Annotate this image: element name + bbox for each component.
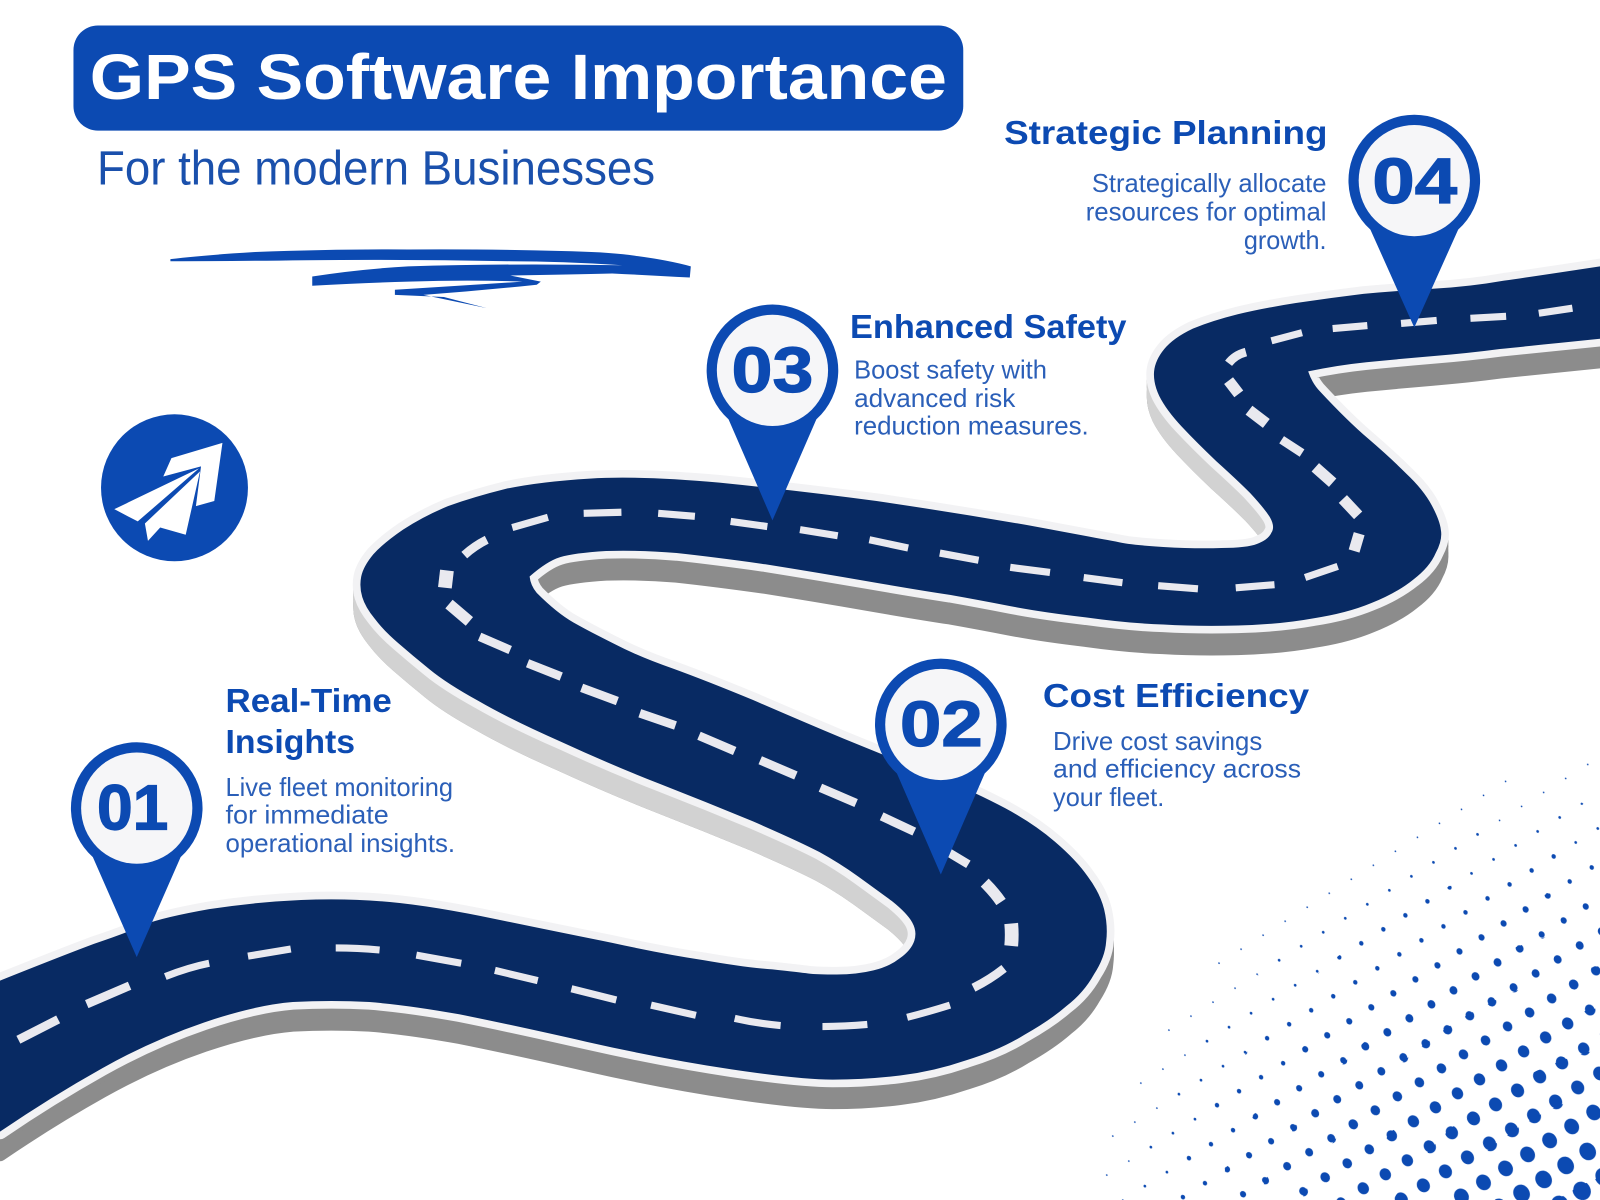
number 04: 04 bbox=[1372, 145, 1457, 217]
road: light side walls bbox=[0, 272, 1600, 1154]
step 01: text block bbox=[226, 683, 455, 858]
icon: paper plane bbox=[114, 468, 200, 541]
number 02: 02 bbox=[900, 688, 983, 760]
description: Strategically allocate bbox=[1092, 170, 1327, 198]
description: your fleet. bbox=[1053, 784, 1164, 812]
halftone dot pattern bbox=[1084, 759, 1600, 1200]
step 04: text block bbox=[1004, 115, 1328, 255]
heading: Real-Time Insights: Insights bbox=[226, 724, 355, 761]
road: dark side wall bbox=[0, 272, 1600, 1154]
title banner bbox=[73, 26, 963, 131]
logo: circle with paper plane arrow bbox=[101, 414, 248, 561]
description: growth. bbox=[1244, 227, 1327, 255]
description: Boost safety with bbox=[854, 357, 1047, 385]
description: and efficiency across bbox=[1053, 756, 1301, 784]
description: Drive cost savings bbox=[1053, 728, 1262, 756]
description bbox=[226, 774, 455, 858]
brush stroke decoration bbox=[170, 249, 691, 308]
description: reduction measures. bbox=[854, 413, 1089, 441]
road: asphalt surface bbox=[0, 266, 1600, 1132]
heading: Strategic Planning: Strategic Planning bbox=[1004, 115, 1328, 152]
heading: Real-Time Insights bbox=[226, 683, 392, 761]
description: advanced risk bbox=[854, 385, 1016, 413]
description: resources for optimal bbox=[1086, 198, 1327, 226]
step 03: pin bbox=[707, 305, 838, 520]
description: for immediate bbox=[226, 801, 389, 829]
description bbox=[1053, 728, 1301, 812]
road: centre dashes bbox=[18, 308, 1572, 1040]
step 01: pin bbox=[71, 742, 203, 957]
step 04: pin bbox=[1348, 115, 1480, 328]
icon: upward arrow bbox=[163, 443, 222, 506]
number 03: 03 bbox=[732, 334, 813, 406]
number 01: 01 bbox=[97, 772, 168, 844]
title text: GPS Software Importance bbox=[90, 41, 947, 113]
heading: Real-Time Insights: Real-Time bbox=[226, 683, 392, 720]
description bbox=[1086, 170, 1327, 255]
subtitle: For the modern Businesses bbox=[97, 143, 655, 196]
winding road bbox=[0, 266, 1600, 1154]
step 02: text block bbox=[1043, 678, 1309, 812]
road: white rim bbox=[0, 266, 1600, 1132]
description bbox=[854, 357, 1089, 441]
step 03: text block bbox=[850, 309, 1127, 441]
heading: Cost Efficiency: Cost Efficiency bbox=[1043, 678, 1309, 715]
description: Live fleet monitoring bbox=[226, 774, 453, 802]
step 02: pin bbox=[875, 659, 1007, 874]
heading: Enhanced Safety: Enhanced Safety bbox=[850, 309, 1127, 346]
description: operational insights. bbox=[226, 830, 455, 858]
